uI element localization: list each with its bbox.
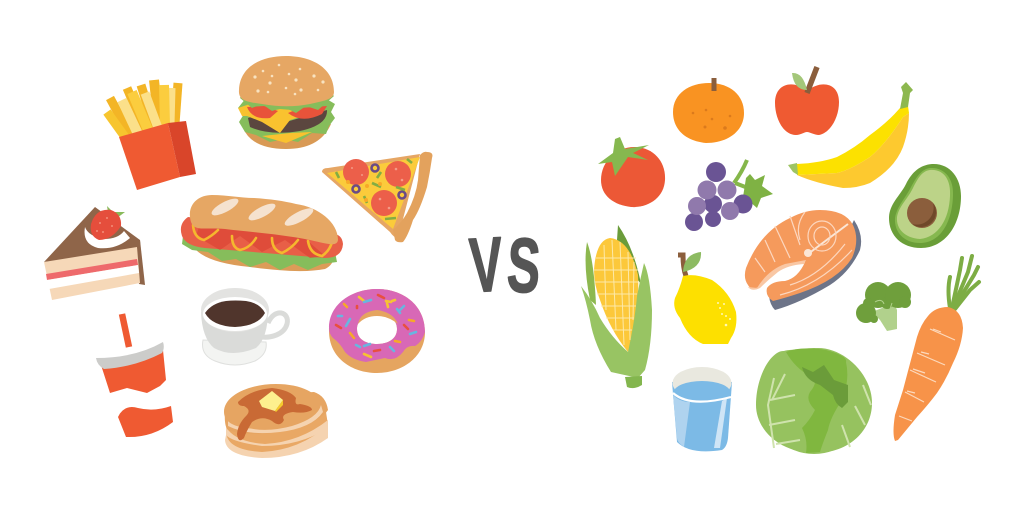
icon: sandwich (181, 195, 343, 271)
olives (352, 164, 406, 198)
calyx (598, 137, 649, 176)
herbs (336, 159, 412, 219)
bun highlights (209, 196, 315, 229)
icon: avocado (889, 164, 961, 248)
icon: corn (581, 225, 652, 388)
bottom bun (243, 124, 331, 149)
handle (262, 313, 287, 337)
icon: apple (775, 67, 839, 135)
icon: coffee cup (201, 288, 287, 365)
seed (907, 198, 937, 228)
cob (594, 238, 638, 352)
top bun (190, 195, 338, 244)
strawberry (91, 206, 125, 240)
icon: french fries (107, 80, 196, 190)
icon: tomato (598, 137, 665, 207)
cup top section (101, 350, 166, 393)
skin (769, 220, 861, 310)
front husk (581, 263, 652, 378)
patty (248, 110, 327, 133)
icon: pancakes (224, 384, 328, 458)
butter (259, 391, 283, 411)
icon: cabbage (756, 348, 872, 454)
icon: broccoli (856, 282, 911, 331)
icon: banana (788, 82, 913, 188)
lettuce (238, 98, 335, 142)
text: VS: S (505, 221, 542, 309)
icon: soda cup (96, 314, 173, 437)
icing (329, 289, 425, 362)
saucer (202, 340, 266, 365)
text: VS: V (467, 220, 505, 309)
pepperoni (343, 159, 411, 216)
icon: lemon (674, 252, 736, 344)
sprinkles (336, 295, 416, 357)
sausage (181, 217, 343, 258)
lid band (96, 342, 164, 369)
chocolate top (44, 207, 141, 262)
top bun (239, 56, 334, 106)
icon: donut (329, 289, 425, 373)
icon: grapes (685, 160, 773, 231)
cheese left (238, 104, 255, 116)
cup body (201, 310, 268, 353)
greens (948, 256, 979, 309)
lettuce (182, 236, 337, 270)
tomato slices (247, 106, 278, 118)
cream (85, 227, 130, 248)
text: VS (467, 220, 542, 309)
cake layers (44, 247, 140, 300)
bottom bun (190, 240, 334, 271)
icon: orange (673, 78, 744, 143)
grid (594, 240, 638, 345)
syrup (237, 388, 312, 440)
icon: hamburger (238, 56, 335, 149)
bone (808, 224, 848, 254)
leaf veins (768, 374, 871, 448)
body (894, 307, 963, 441)
centre leaf (786, 348, 847, 453)
top pancake (224, 384, 320, 428)
sesame seeds (253, 64, 325, 95)
flesh lines (755, 212, 852, 295)
icon: pizza slice (322, 152, 432, 242)
coffee (205, 300, 265, 327)
flesh (745, 210, 856, 301)
icon: cake slice (44, 206, 145, 300)
back husk (617, 225, 641, 284)
rim (201, 288, 269, 332)
cheese drip (247, 109, 316, 133)
cup lower section (118, 406, 173, 437)
icon: glass of water (672, 367, 732, 451)
icon: carrot (894, 256, 979, 441)
icon: salmon steak (745, 210, 861, 310)
straw (122, 314, 129, 347)
lettuce top (240, 88, 334, 113)
mustard (193, 225, 333, 256)
